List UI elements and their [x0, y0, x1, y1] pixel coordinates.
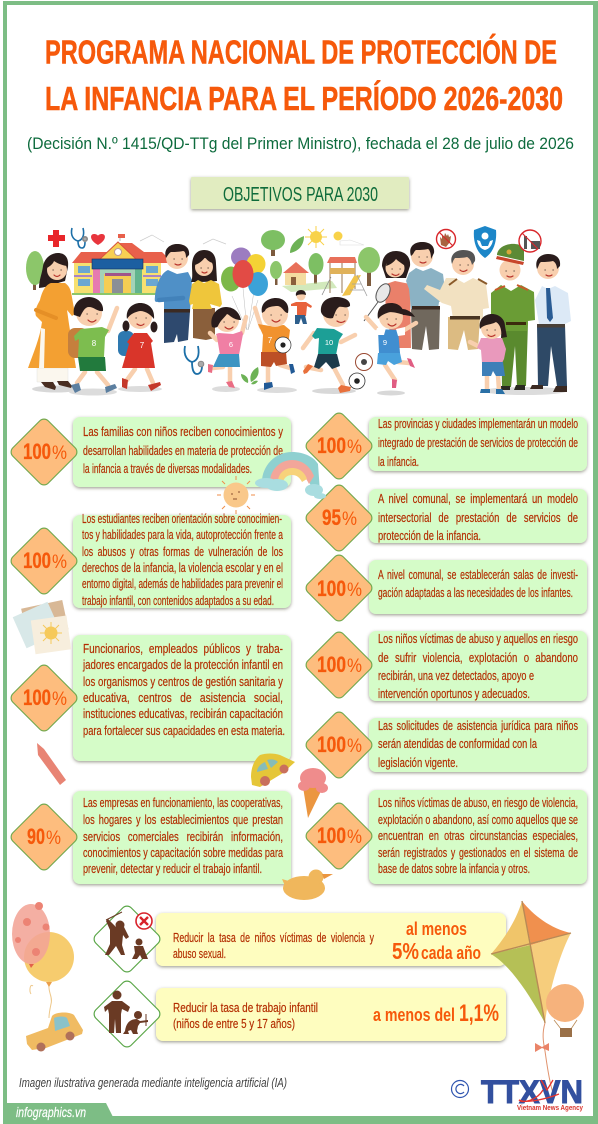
figure: police officer in green — [483, 244, 567, 395]
panel: left target 3: los organismos y centros de gestión sanitaria y — [83, 674, 283, 689]
decoration: rainbow and clouds — [255, 452, 326, 499]
panel: goal violence reduction: abuso sexual. — [173, 946, 226, 961]
panel: left target 2: % — [52, 552, 67, 573]
decoration: crayon — [37, 743, 66, 785]
icon: red cross — [48, 230, 65, 247]
decoration: sun — [217, 476, 255, 514]
panel: goal violence reduction: 5% — [392, 938, 419, 964]
panel: goal violence reduction — [92, 904, 506, 974]
illustration: community and children — [26, 226, 571, 396]
panel: right target 4: recibirán, una vez detectados, apoyo e — [378, 668, 534, 683]
panel: left target 4: conocimientos y capacitación sobre medidas para — [83, 845, 284, 860]
logo: TTXVN: Vietnam News Agency — [517, 1105, 583, 1112]
panel: left target 1: 100 — [23, 439, 51, 464]
icon: soccer balls — [349, 354, 372, 389]
figure: girl in blue number 9 with racket: 9 — [383, 338, 387, 347]
panel: left target 4: prevenir, detectar y reducir el trabajo infantil. — [83, 861, 262, 876]
figure: father in grey-blue shirt — [406, 242, 446, 350]
panel: right target 1 — [304, 411, 587, 481]
icon: heart — [91, 234, 105, 245]
figure: boy in orange with ball — [255, 298, 297, 393]
panel: left target 3: % — [52, 689, 67, 710]
panel: left target 2: tos y habilidades para la vida, autoprotección frente a — [82, 527, 283, 542]
figure: boy number 10 — [303, 297, 356, 394]
panel: right target 1: % — [347, 437, 362, 458]
panel: right target 4 — [304, 630, 587, 701]
figure: boy with green shirt — [68, 297, 117, 396]
panel: left target 1: la infancia a través de diversas modalidades. — [83, 461, 252, 476]
building: school — [72, 234, 173, 295]
panel: right target 4: intervención oportunos y adecuados. — [378, 686, 530, 701]
panel: right target 4: 100 — [317, 652, 346, 677]
decoration: hot air balloon — [546, 984, 584, 1037]
decoration: ice cream — [298, 768, 328, 818]
panel: left target 1: Las familias con niños reciben conocimientos y — [83, 424, 283, 439]
panel: right target 5: 100 — [317, 732, 346, 757]
panel: right target 1: la infancia. — [378, 454, 419, 469]
figure: boy in orange with ball: 7 — [268, 336, 273, 345]
figure: teacher in orange ao dai — [28, 253, 80, 392]
icons: prohibition signs and shield — [436, 226, 541, 258]
panel: right target 4: % — [347, 656, 362, 677]
panel: right target 3: % — [347, 580, 362, 601]
decoration: balloons — [12, 902, 74, 1018]
footer tab: infographics.vn — [16, 1104, 86, 1120]
panel: right target 6 — [304, 790, 587, 884]
panel: left target 3 — [9, 635, 291, 761]
figure: girl in pink: 6 — [229, 340, 233, 349]
panel: left target 1: % — [52, 443, 67, 464]
figure: girl in blue number 9 with racket — [364, 281, 416, 396]
decoration: picture cards — [13, 600, 71, 654]
panel: left target 3: 100 — [23, 685, 51, 710]
panel: left target 2: Los estudiantes reciben orientación sobre conocimien- — [82, 511, 282, 526]
panel: left target 3: educativa, centros de asistencia social, — [83, 690, 283, 705]
figure: mother in yellow blouse — [189, 250, 222, 340]
panel: right target 5: % — [347, 736, 362, 757]
panel: goal child labour reduction: 1,1% — [459, 1000, 499, 1027]
panel: right target 6: 100 — [317, 823, 346, 848]
trees and sky background — [26, 226, 380, 292]
footnote: Imagen ilustrativa generada mediante inteligencia artificial (IA) — [19, 1075, 287, 1090]
decoration: toy truck — [26, 1012, 83, 1052]
panel: right target 5 — [304, 710, 587, 780]
panel: left target 2 — [9, 511, 291, 608]
figure: mother in coral dress — [382, 251, 411, 348]
panel: left target 4: 90 — [27, 824, 45, 849]
panel: right target 1: 100 — [317, 433, 346, 458]
panel: right target 2: 95 — [322, 505, 341, 530]
panel: right target 2 — [304, 483, 587, 553]
decoration: duck — [282, 870, 333, 900]
figure: little girl in pink — [470, 314, 507, 394]
panel: goal violence reduction: al menos — [406, 919, 467, 939]
decoration: kite — [491, 901, 571, 1093]
objectives banner — [191, 177, 409, 209]
figure: girl with red dress: 7 — [140, 341, 145, 350]
panel: left target 2: trabajo infantil, con contenidos adaptados a su edad. — [82, 593, 274, 608]
panel: right target 6: base de datos sobre la infancia y otros. — [378, 861, 530, 876]
panel: goal child labour reduction: Reducir la tasa de trabajo infantil — [173, 1000, 318, 1015]
panel: right target 3 — [304, 553, 587, 623]
panel: left target 2: los abusos y otras formas de vulneración de los — [82, 544, 283, 559]
figure: boy number 10: 10 — [325, 338, 333, 347]
panel: left target 2: derechos de la infancia, la violencia escolar y en el — [82, 560, 283, 575]
panel: left target 2: 100 — [23, 548, 51, 573]
panel: left target 4: los hogares y los establecimientos que prestan — [83, 812, 283, 827]
figure: father in blue shirt — [155, 244, 192, 343]
panel: right target 5: serán atendidas de conformidad con la — [378, 736, 538, 751]
figure: girl with red dress — [118, 303, 162, 392]
panel: left target 1 — [9, 417, 291, 487]
panel: goal child labour reduction — [92, 979, 506, 1049]
panel: left target 1: desarrollan habilidades en materia de protección de — [83, 443, 283, 458]
panel: right target 5: legislación vigente. — [378, 755, 458, 770]
panel: left target 4 — [9, 791, 291, 884]
objectives banner: OBJETIVOS PARA 2030 — [223, 184, 378, 206]
panel: right target 3: 100 — [317, 576, 346, 601]
panel: left target 3: Funcionarios, empleados públicos y traba- — [83, 641, 283, 656]
figure: boy with green shirt: 8 — [92, 339, 97, 348]
panel: left target 4: % — [46, 828, 61, 849]
title — [45, 34, 563, 118]
panel: left target 2: entorno digital, además de habilidades para prevenir el — [82, 576, 283, 591]
panel: left target 3: jadores encargados de la protección infantil en — [82, 657, 283, 672]
panel: left target 3: para fortalecer sus capacidades en esta materia. — [83, 723, 285, 738]
icon: green leaves — [241, 367, 259, 384]
figure: small running child — [291, 290, 312, 324]
icon: stethoscope top — [71, 228, 87, 248]
icon: child labour — [92, 979, 162, 1049]
figure: official in white shirt — [530, 254, 571, 392]
icon: violence against children prohibited — [92, 904, 162, 974]
panel: goal violence reduction: Reducir la tasa de niños víctimas de violencia y — [173, 930, 374, 945]
figure: traffic officer in beige — [424, 250, 489, 350]
icon: stethoscope bottom — [185, 346, 204, 374]
figure: girl in pink — [208, 307, 246, 392]
panel: goal child labour reduction: a menos del — [373, 1005, 455, 1025]
panel: left target 4: Las empresas en funcionamiento, las cooperativas, — [83, 795, 283, 810]
panel: left target 4: servicios comerciales recibirán información, — [83, 829, 283, 844]
panel: right target 2: protección de la infancia. — [378, 528, 481, 543]
panel: goal violence reduction: cada año — [421, 943, 481, 963]
copyright symbol — [452, 1080, 468, 1098]
logo: TTXVN: TTXVN — [481, 1074, 583, 1110]
panel: left target 3: instituciones educativas, recibirán capacitación — [83, 706, 283, 721]
decoration: toy car — [251, 754, 295, 787]
balloons — [221, 248, 268, 330]
panel: goal child labour reduction: (niños de entre 5 y 17 años) — [173, 1016, 295, 1031]
panel: right target 2: % — [342, 509, 357, 530]
playground and house — [283, 257, 367, 296]
panel: right target 6: % — [347, 827, 362, 848]
